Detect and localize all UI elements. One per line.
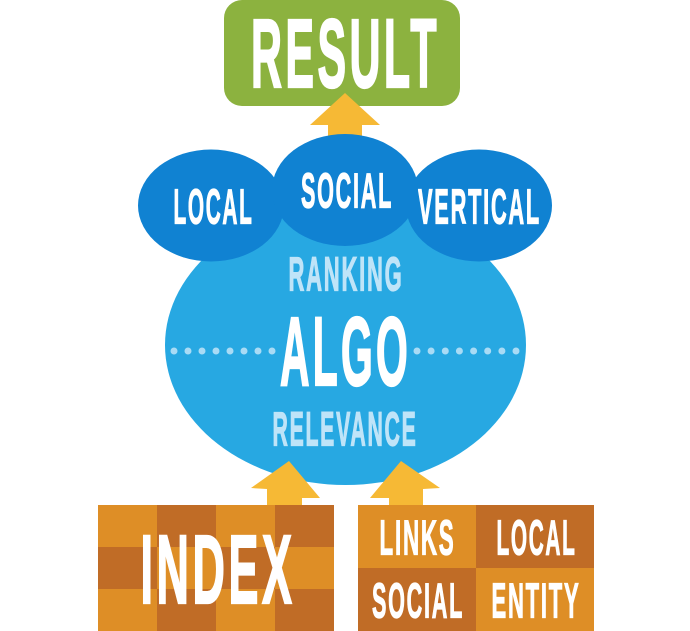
- bubble: local: LOCAL: [174, 180, 254, 234]
- bubble: social: SOCIAL: [301, 164, 393, 218]
- dotted line: left: [170, 348, 276, 354]
- arrow: algo to result: [310, 93, 380, 140]
- panel: signals grid: SOCIAL: [372, 574, 464, 628]
- panel: algo ellipse: RELEVANCE: [272, 404, 418, 456]
- panel: signals grid: [358, 505, 594, 631]
- panel: result box: [224, 0, 460, 108]
- panel: signals grid: LOCAL: [496, 512, 576, 566]
- arrow: index to algo: [251, 461, 320, 510]
- bubble: vertical: [406, 150, 552, 262]
- panel: algo ellipse: [165, 205, 526, 485]
- panel: signals grid: LINKS: [380, 512, 456, 566]
- dotted line: right: [414, 348, 520, 354]
- panel: algo ellipse: RANKING: [288, 248, 404, 302]
- text: RESULT: [251, 0, 440, 108]
- panel: signals grid: ENTITY: [492, 574, 580, 628]
- text: VERTICAL: [418, 180, 541, 234]
- panel: algo ellipse: ALGO: [280, 297, 411, 406]
- bubble: social: [272, 134, 418, 246]
- arrow: signals to algo: [370, 461, 440, 510]
- panel: index grid: INDEX: [140, 515, 296, 624]
- panel: index grid: [98, 505, 334, 631]
- bubble: local: [138, 150, 284, 262]
